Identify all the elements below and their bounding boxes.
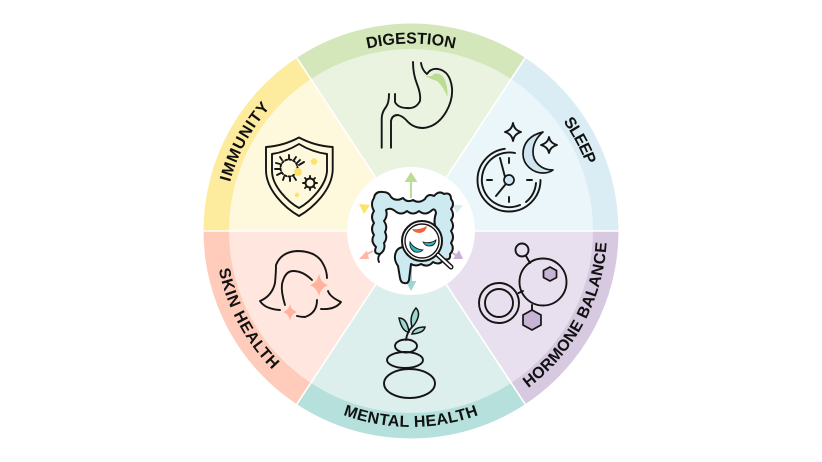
icon: stomach bbox=[382, 62, 452, 148]
heading: sleep: SLEEP bbox=[564, 117, 596, 162]
heading: immunity: IMMUNITY bbox=[220, 100, 268, 182]
panel: sleep sector bbox=[411, 58, 618, 231]
panel: skin health sector bbox=[204, 231, 411, 404]
icon: colon with magnifier bbox=[372, 192, 453, 283]
center white circle bbox=[347, 167, 475, 295]
heading: hormone balance: HORMONE BALANCE bbox=[522, 242, 607, 388]
panel: digestion sector bbox=[297, 24, 525, 231]
arrow: down teal bbox=[406, 262, 416, 291]
panel: immunity sector bbox=[204, 58, 411, 231]
arrow: up green bbox=[404, 172, 418, 198]
heading: skin health: SKIN HEALTH bbox=[220, 268, 280, 369]
arrow: light blue bbox=[452, 205, 463, 213]
heading: digestion: DIGESTION bbox=[366, 32, 456, 48]
icon: hair with sparkles bbox=[260, 251, 341, 321]
icon: clock and moon bbox=[478, 123, 557, 212]
icon: balanced stones with leaves bbox=[384, 308, 435, 398]
arrow: salmon bbox=[359, 250, 373, 259]
arrow: purple bbox=[447, 250, 463, 259]
icon: hormone molecules bbox=[479, 244, 566, 330]
icon: virus shield bbox=[266, 138, 333, 216]
panel: hormone balance sector bbox=[411, 231, 618, 404]
arrow: yellow bbox=[359, 204, 370, 214]
heading: mental health: MENTAL HEALTH bbox=[344, 404, 478, 427]
panel: mental health sector bbox=[297, 231, 525, 438]
